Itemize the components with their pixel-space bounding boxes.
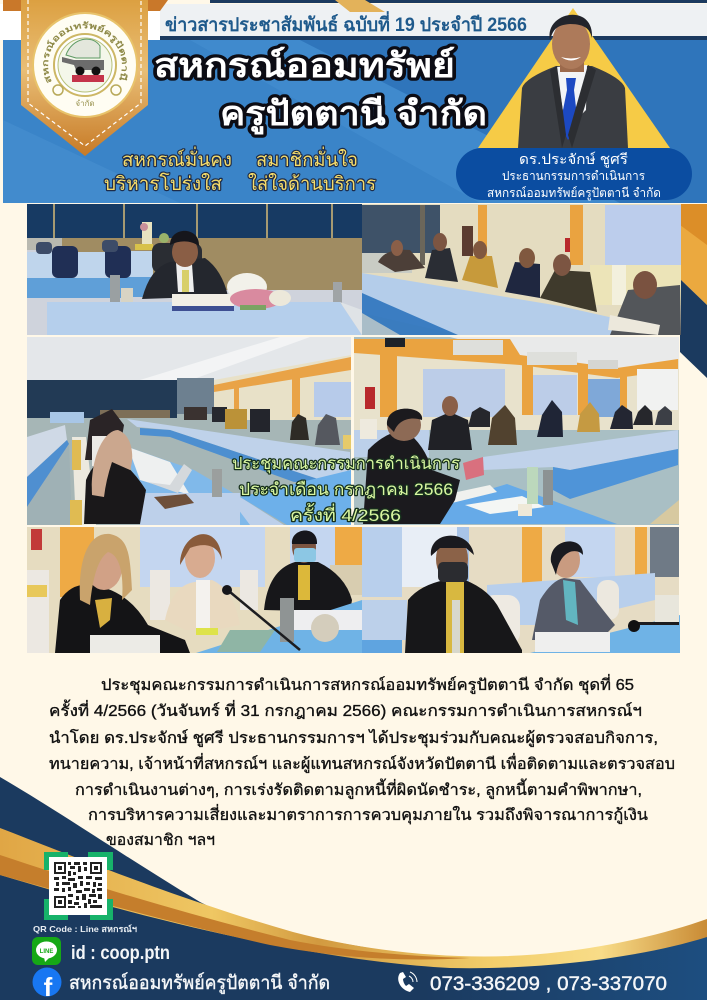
icon: LINE: LINE	[40, 949, 53, 955]
slogans: สหกรณ์มั่นคง	[122, 146, 232, 171]
article paragraph: ประชุมคณะกรรมการดำเนินการสหกรณ์ออมทรัพย์ครูปัตตานี จำกัด ชุดที่ 65	[101, 674, 634, 695]
slogans: บริหารโปร่งใส	[104, 172, 222, 195]
chairman name plate: ประธานกรรมการดำเนินการ	[502, 169, 645, 183]
meeting caption	[232, 454, 460, 525]
article paragraph: การบริหารความเสี่ยงและมาตราการการควบคุมภายใน รวมถึงพิจารณาการกู้เงิน	[88, 804, 648, 825]
photo: chairman at table	[27, 204, 362, 335]
cooperative logo ribbon	[3, 0, 168, 156]
cooperative logo ribbon: จำกัด	[75, 99, 95, 108]
slogans	[104, 146, 376, 195]
QR caption: QR Code : Line สหกรณ์ฯ	[33, 924, 137, 934]
chairman portrait	[478, 8, 670, 148]
icon: Facebook	[32, 968, 62, 1000]
main title	[154, 46, 487, 135]
article paragraph: ของสมาชิก ฯลฯ	[106, 832, 215, 849]
cooperative logo ribbon: สหกรณ์ออมทรัพย์ครูปัตตานี	[43, 21, 128, 84]
photo: three staff members	[27, 527, 362, 653]
newsletter issue heading: ข่าวสารประชาสัมพันธ์ ฉบับที่ 19 ประจำปี 2566	[165, 11, 527, 36]
photo: room wide view	[27, 337, 351, 525]
photo: two staff members	[362, 527, 680, 653]
chairman name plate: ดร.ประจักษ์ ชูศรี	[519, 151, 629, 168]
header top band	[0, 0, 707, 40]
meeting caption: ประจำเดือน กรกฎาคม 2566	[239, 480, 453, 499]
Line id: id : coop.ptn	[71, 943, 170, 964]
slogans: ใส่ใจด้านบริการ	[248, 173, 376, 195]
icon: phone	[398, 972, 417, 992]
right side decoration	[680, 204, 707, 378]
photo: room right view	[354, 337, 679, 525]
article paragraph	[49, 674, 675, 849]
main title: สหกรณ์ออมทรัพย์	[154, 46, 455, 85]
photo: committee along table	[362, 204, 681, 335]
chairman name plate	[456, 148, 692, 201]
QR code	[44, 852, 112, 920]
footer background with gold swoosh	[0, 777, 707, 1000]
article paragraph: ครั้งที่ 4/2566 (วันจันทร์ ที่ 31 กรกฎาคม 2566) คณะกรรมการดำเนินการสหกรณ์ฯ	[49, 699, 642, 720]
chairman name plate: สหกรณ์ออมทรัพย์ครูปัตตานี จำกัด	[487, 186, 661, 201]
header blue banner	[3, 40, 707, 203]
meeting caption: ประชุมคณะกรรมการดำเนินการ	[232, 454, 460, 474]
article paragraph: ทนายความ, เจ้าหน้าที่สหกรณ์ฯ และผู้แทนสหกรณ์จังหวัดปัตตานี เพื่อติดตามและตรวจสอบ	[49, 753, 675, 774]
main title: ครูปัตตานี จำกัด	[220, 95, 487, 135]
Facebook page name: สหกรณ์ออมทรัพย์ครูปัตตานี จำกัด	[69, 972, 330, 994]
meeting caption: ครั้งที่ 4/2566	[290, 503, 401, 525]
slogans: สมาชิกมั่นใจ	[256, 146, 358, 171]
icon: LINE	[32, 937, 61, 965]
article paragraph: นำโดย ดร.ประจักษ์ ชูศรี ประธานกรรมการฯ ได้ประชุมร่วมกับคณะผู้ตรวจสอบกิจการ,	[49, 729, 658, 748]
phone numbers: 073-336209 , 073-337070	[430, 974, 667, 995]
article paragraph: การดำเนินงานต่างๆ, การเร่งรัดติดตามลูกหนี้ที่ผิดนัดชำระ, ลูกหนี้ตามคำพิพากษา,	[75, 778, 642, 800]
